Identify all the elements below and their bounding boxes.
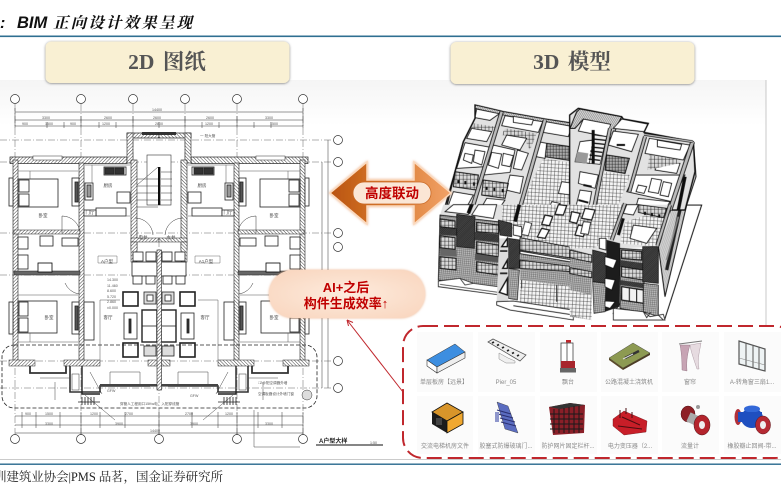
dimension text: 3300 bbox=[45, 422, 53, 426]
dimension text: 3900 bbox=[115, 422, 123, 426]
room labels: 水井 bbox=[166, 234, 176, 241]
source note: 圳建筑业协会|PMS 品茗，国金证券研究所 bbox=[0, 469, 223, 484]
dimension text: 空调板器设计外墙门窗 bbox=[258, 391, 294, 396]
dimension text bbox=[22, 108, 294, 433]
room labels: 客厅 bbox=[104, 314, 113, 321]
dimension text: 1200 bbox=[225, 412, 233, 416]
icon: pier bbox=[488, 339, 526, 363]
callout: AI efficiency: AI+之后 bbox=[323, 280, 369, 295]
dimension text: 14.300 bbox=[107, 278, 118, 282]
plan title: 1:50 bbox=[370, 441, 377, 445]
double arrow: high linkage bbox=[330, 162, 451, 224]
room labels: 卧室 bbox=[38, 212, 48, 219]
icon: concrete paver bbox=[609, 343, 650, 370]
icon: transformer bbox=[613, 408, 647, 435]
dimension text: 穿管人工程用口15Kw电，入阳穿线管 bbox=[120, 401, 180, 406]
component labels: 公路混凝土浇筑机 bbox=[605, 378, 653, 386]
plan title: A户型大样 bbox=[319, 437, 347, 445]
room labels: 厨房 bbox=[198, 182, 207, 189]
component labels: 胶塞式防爆玻璃门... bbox=[479, 442, 533, 450]
component labels bbox=[420, 378, 777, 450]
footer rule bbox=[0, 464, 781, 465]
icon: prefab house bbox=[427, 344, 465, 373]
dimension text: 1200 bbox=[205, 122, 213, 126]
component labels: 交流电梯机房文件 bbox=[421, 442, 469, 450]
component labels: 防护网片固定栏杆... bbox=[541, 442, 595, 450]
component labels: Pier_05 bbox=[496, 380, 517, 386]
dimension text: 3300 bbox=[42, 116, 50, 120]
heading: 3D model: 3D 模型 bbox=[533, 50, 611, 74]
component labels: 窗帘 bbox=[684, 378, 696, 386]
component cards bbox=[417, 332, 781, 454]
dimension text: GFW bbox=[107, 389, 116, 393]
dimension text: 2600 bbox=[104, 116, 112, 120]
heading: 2D drawing bbox=[46, 42, 290, 83]
dimension text: 3900 bbox=[190, 422, 198, 426]
component labels: 单层板房【远景】 bbox=[420, 378, 468, 386]
panel: component library bbox=[403, 326, 781, 458]
staircase bbox=[137, 155, 172, 207]
title bbox=[0, 14, 194, 32]
dimension text: 2700 bbox=[185, 412, 193, 416]
room labels: 门厅 bbox=[86, 209, 95, 216]
bottom left quadrant bbox=[438, 205, 573, 320]
dimension text: 2600 bbox=[153, 116, 161, 120]
dimension text: 14400 bbox=[150, 429, 160, 433]
dimension text: 14400 bbox=[152, 108, 162, 112]
grid axes bbox=[10, 94, 342, 444]
dimension text: 900 bbox=[22, 122, 28, 126]
top left quadrant bbox=[445, 105, 573, 210]
dimension text: 11.460 bbox=[107, 284, 118, 288]
dimension lines bbox=[15, 112, 328, 433]
dimension text: 900 bbox=[25, 412, 31, 416]
room labels: 电井 bbox=[138, 234, 148, 241]
arrow label: 高度联动 bbox=[365, 185, 419, 201]
dimension text: 1200 bbox=[90, 412, 98, 416]
dimension text: 3300 bbox=[265, 422, 273, 426]
title: 正向设计效果呈现 bbox=[53, 14, 194, 32]
room labels: 卧室 bbox=[44, 314, 54, 321]
room labels bbox=[38, 182, 279, 321]
room labels: A1户型 bbox=[199, 258, 214, 265]
icon: generator bbox=[432, 403, 463, 433]
dimension text: □2@阳空调器外墙 bbox=[258, 380, 288, 385]
dimension text: GFW bbox=[190, 394, 199, 398]
icon: rubber check valve bbox=[734, 406, 770, 434]
center wall bbox=[157, 250, 162, 390]
dimension text: 2800 bbox=[155, 122, 163, 126]
plan title bbox=[316, 437, 383, 445]
room labels: 门厅 bbox=[224, 209, 233, 216]
right half of plan, mirrored bbox=[159, 132, 309, 420]
component labels: 电力变压器（2... bbox=[608, 442, 652, 450]
dimension text: 2600 bbox=[206, 116, 214, 120]
dimension text: 1500 bbox=[45, 412, 53, 416]
dimension text: 900 bbox=[70, 122, 76, 126]
room labels: 卧室 bbox=[270, 314, 279, 321]
dimension text: 1500 bbox=[45, 122, 53, 126]
component labels: 橡胶瓣止回阀-带... bbox=[728, 442, 777, 450]
bottom right quadrant bbox=[570, 203, 670, 320]
dimension text: 8.600 bbox=[107, 289, 116, 293]
header rule bbox=[0, 36, 781, 37]
heading: 3D model bbox=[450, 42, 694, 84]
dimension text: 2700 bbox=[125, 412, 133, 416]
title: BIM bbox=[17, 14, 48, 32]
red pointer arrow bbox=[347, 320, 403, 392]
dimension text: 一 阳大管 bbox=[200, 133, 216, 138]
dimension text: ±0.000 bbox=[107, 306, 118, 310]
icon: curtain bbox=[679, 341, 702, 371]
room labels: 卧室 bbox=[270, 212, 279, 219]
component labels: 流量计 bbox=[681, 442, 699, 450]
dimension text: 5.720 bbox=[107, 295, 116, 299]
room labels: 厨房 bbox=[104, 182, 113, 189]
3D building model bbox=[438, 105, 702, 320]
component labels: A-转角窗三扇1... bbox=[730, 378, 774, 386]
icon: flow meter bbox=[681, 405, 710, 435]
dashed balcony outline bbox=[2, 345, 317, 408]
dimension text: 1200 bbox=[102, 122, 110, 126]
dimension text: 1500 bbox=[270, 122, 278, 126]
icon: guard rail mesh bbox=[549, 403, 585, 435]
icon: corner window bbox=[739, 341, 765, 371]
title: : bbox=[0, 15, 5, 32]
callout: AI efficiency bbox=[269, 270, 425, 318]
left half of plan bbox=[9, 132, 159, 420]
drawing panel background bbox=[0, 80, 766, 460]
top right quadrant bbox=[570, 108, 695, 210]
dimension text: 2.860 bbox=[107, 300, 116, 304]
dimension text: 3300 bbox=[265, 116, 273, 120]
callout: AI efficiency: 构件生成效率↑ bbox=[304, 296, 388, 311]
icon: bay window bbox=[560, 340, 576, 372]
base plate and right face bbox=[613, 142, 702, 318]
room labels: 客厅 bbox=[200, 314, 210, 321]
room labels: A户型 bbox=[101, 258, 113, 265]
icon: blast door bbox=[495, 402, 518, 433]
component labels: 飘台 bbox=[562, 378, 574, 386]
heading: 2D drawing: 2D 图纸 bbox=[128, 50, 206, 74]
2D floor plan drawing bbox=[0, 94, 383, 447]
